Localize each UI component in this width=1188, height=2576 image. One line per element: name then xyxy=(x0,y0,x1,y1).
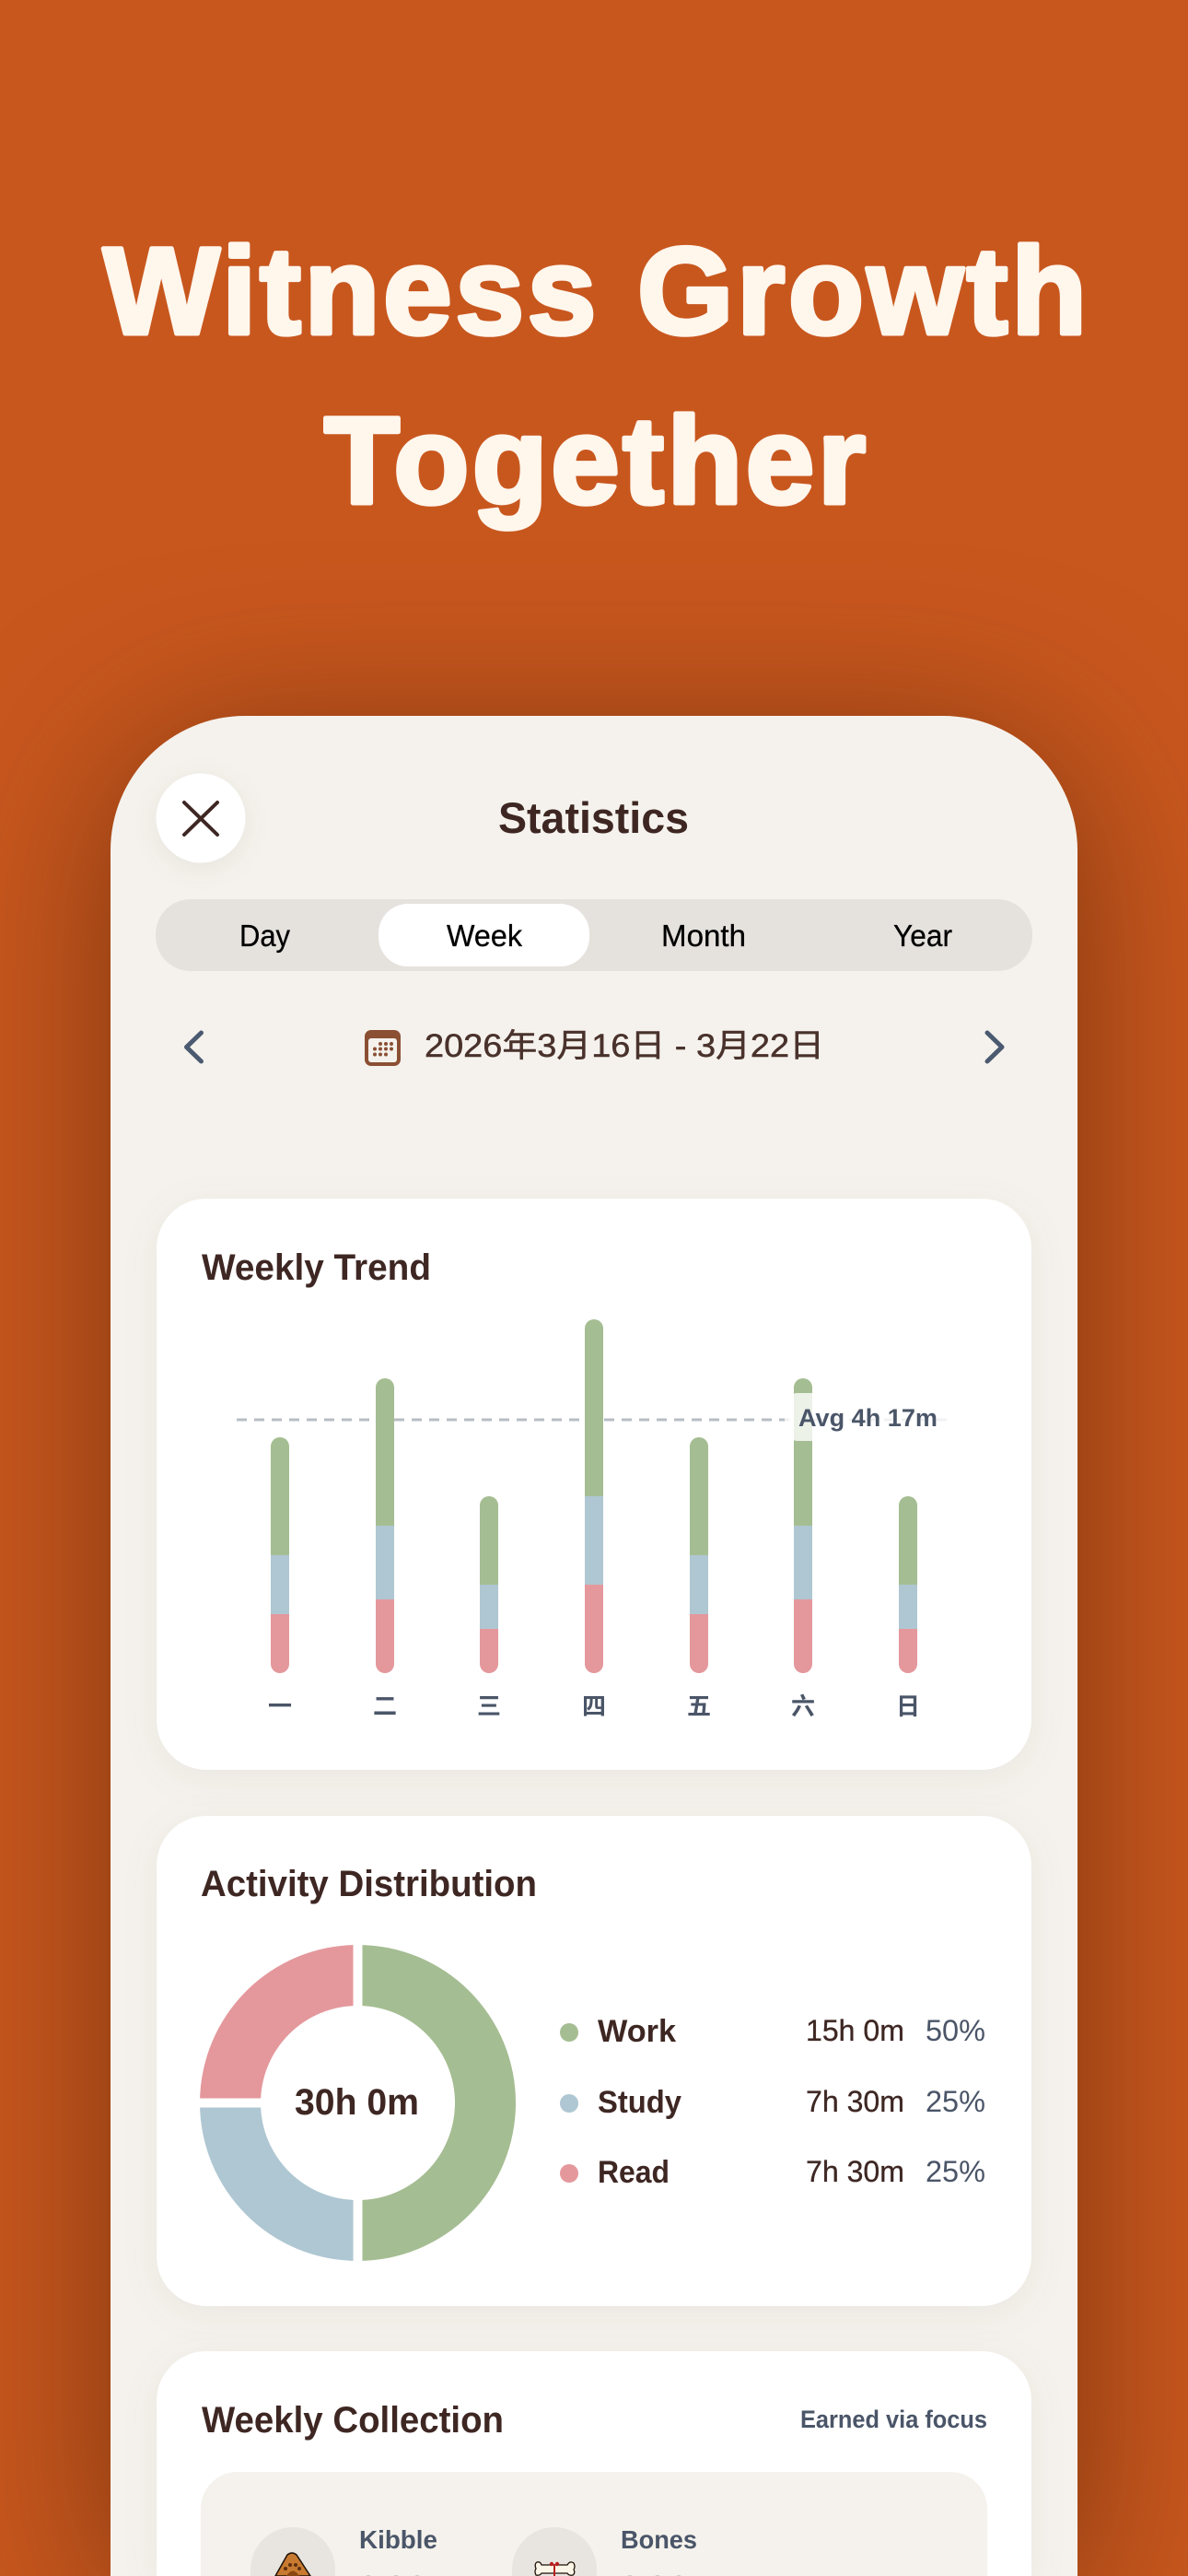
average label: Avg 4h 17m xyxy=(798,1404,938,1432)
icon: previous chevron xyxy=(186,1033,201,1061)
legend: Study xyxy=(598,2085,681,2120)
icon: next chevron xyxy=(987,1033,1002,1061)
weekday labels: 四 xyxy=(582,1692,606,1720)
heading: weekly collection: Weekly Collection xyxy=(202,2400,504,2441)
heading: activity distribution: Activity Distribution xyxy=(201,1864,537,1904)
date range: 2026年3月16日 - 3月22日 xyxy=(425,1028,824,1064)
icon: kibble xyxy=(275,2553,310,2576)
date navigator xyxy=(186,1028,1002,1066)
segmented control: Month xyxy=(661,919,746,953)
screen heading: Statistics xyxy=(498,793,689,842)
weekday labels: 五 xyxy=(687,1692,711,1720)
weekday labels: 二 xyxy=(373,1692,397,1720)
phone screen xyxy=(111,716,1077,2576)
legend: 15h 0m xyxy=(806,2014,904,2047)
weekday labels: 一 xyxy=(268,1692,292,1720)
weekday labels: 日 xyxy=(896,1692,920,1720)
legend: 50% xyxy=(926,2014,985,2047)
panel: activity distribution xyxy=(157,1816,1031,2306)
legend: Read xyxy=(598,2155,670,2190)
panel: weekly trend xyxy=(157,1199,1031,1770)
item: bones xyxy=(512,2525,697,2576)
legend: Work xyxy=(598,2014,676,2049)
weekday labels: 六 xyxy=(791,1692,815,1720)
segmented control: Year xyxy=(893,919,952,953)
icon: calendar xyxy=(365,1030,401,1066)
legend: 25% xyxy=(926,2085,985,2118)
note: earned via focus: Earned via focus xyxy=(800,2406,987,2433)
close button xyxy=(157,774,245,862)
segmented control xyxy=(156,899,1032,971)
item: bones: Bones xyxy=(621,2525,697,2554)
legend: 7h 30m xyxy=(806,2155,904,2188)
icon: bone xyxy=(535,2562,575,2576)
legend xyxy=(560,2014,985,2190)
collection tray xyxy=(201,2472,987,2576)
segmented control: Day xyxy=(239,919,290,953)
title: Witness Growth xyxy=(103,223,1087,360)
legend: 7h 30m xyxy=(806,2085,904,2118)
segmented control: Week xyxy=(447,919,522,953)
item: kibble xyxy=(250,2525,437,2576)
item: kibble: Kibble xyxy=(359,2525,437,2554)
average label xyxy=(785,1393,948,1441)
panel: weekly collection xyxy=(157,2351,1031,2576)
stacked bar chart xyxy=(271,1319,917,1673)
weekday labels xyxy=(268,1692,920,1720)
average line xyxy=(237,1419,948,1421)
title xyxy=(103,223,1087,530)
donut chart xyxy=(193,1939,516,2266)
title: Together xyxy=(324,392,866,530)
legend: 25% xyxy=(926,2155,985,2188)
weekday labels: 三 xyxy=(477,1692,501,1720)
heading: weekly trend: Weekly Trend xyxy=(202,1247,431,1288)
donut total: 30h 0m xyxy=(295,2082,419,2123)
